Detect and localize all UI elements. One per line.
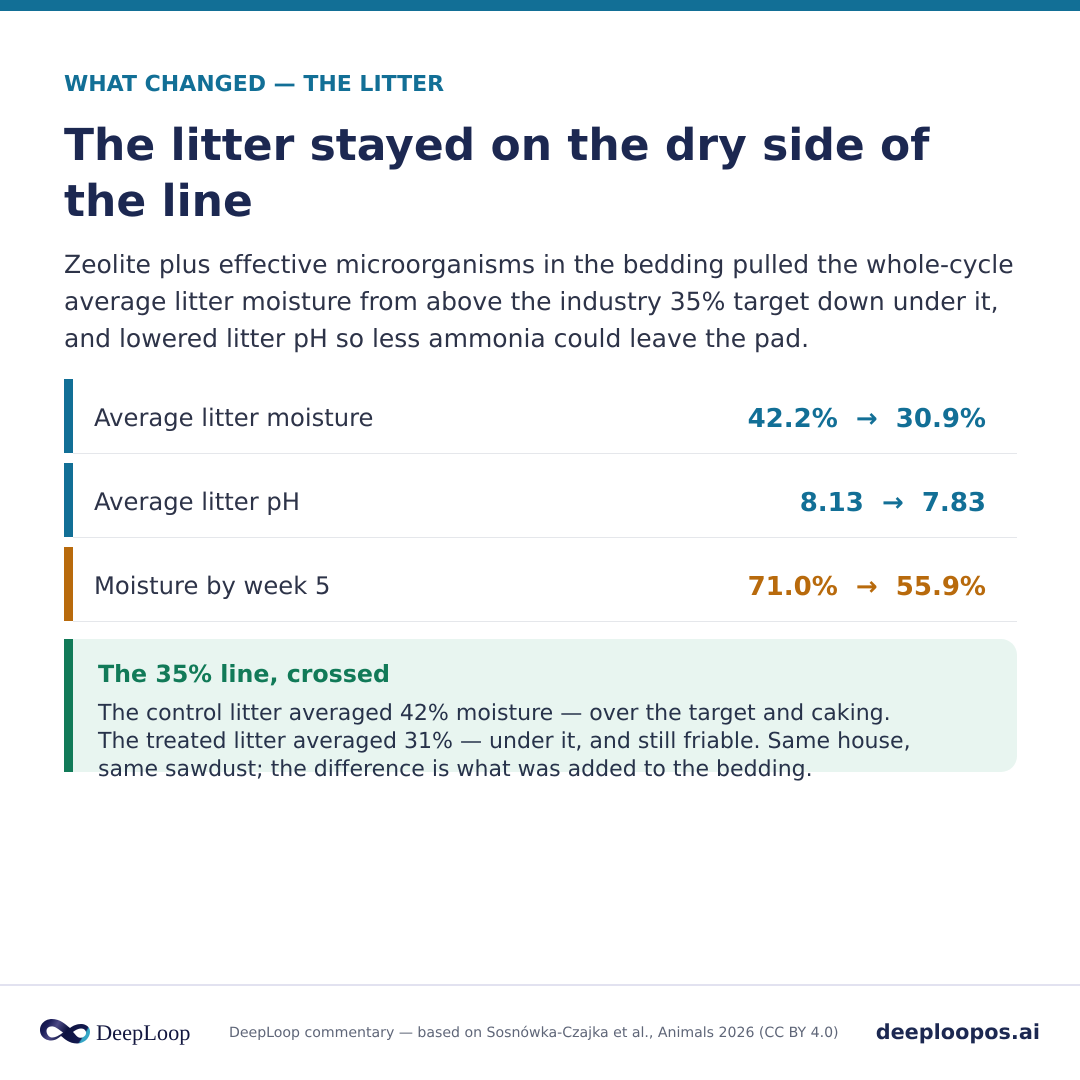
footer divider — [0, 984, 1080, 986]
intro text: average litter moisture from above the industry 35% target down under it, — [64, 287, 999, 316]
title — [64, 120, 930, 227]
row: average litter pH: Average litter pH — [94, 487, 300, 516]
intro text: and lowered litter pH so less ammonia could leave the pad. — [64, 324, 809, 353]
callout body: The control litter averaged 42% moisture — over the target and caking. — [98, 701, 891, 726]
row: moisture by week 5: 71.0% → 55.9% — [748, 572, 986, 602]
source credit: DeepLoop commentary — based on Sosnówka-Czajka et al., Animals 2026 (CC BY 4.0) — [229, 1025, 839, 1041]
intro text: Zeolite plus effective microorganisms in the bedding pulled the whole-cycle — [64, 250, 1014, 279]
callout body — [98, 701, 911, 782]
intro text — [64, 250, 1014, 353]
callout accent — [64, 639, 73, 772]
row: average litter moisture: 42.2% → 30.9% — [748, 404, 986, 434]
logo wordmark: DeepLoop — [96, 1020, 191, 1045]
callout heading: The 35% line, crossed — [98, 660, 390, 688]
top bar — [0, 0, 1080, 11]
row: average litter moisture — [64, 379, 1017, 454]
row: average litter pH — [64, 463, 1017, 538]
callout — [64, 639, 1017, 772]
row: moisture by week 5 — [64, 547, 1017, 622]
title: The litter stayed on the dry side of — [64, 120, 929, 171]
eyebrow: WHAT CHANGED — THE LITTER — [64, 72, 444, 97]
icon: DeepLoop logo — [40, 1019, 90, 1044]
row: moisture by week 5: Moisture by week 5 — [94, 571, 330, 600]
callout body: same sawdust; the difference is what was added to the bedding. — [98, 757, 813, 782]
website: deeploopos.ai — [876, 1020, 1040, 1044]
row: average litter pH: 8.13 → 7.83 — [800, 488, 986, 518]
row: average litter moisture: Average litter moisture — [94, 403, 373, 432]
callout body: The treated litter averaged 31% — under it, and still friable. Same house, — [98, 729, 911, 754]
title: the line — [64, 176, 253, 227]
